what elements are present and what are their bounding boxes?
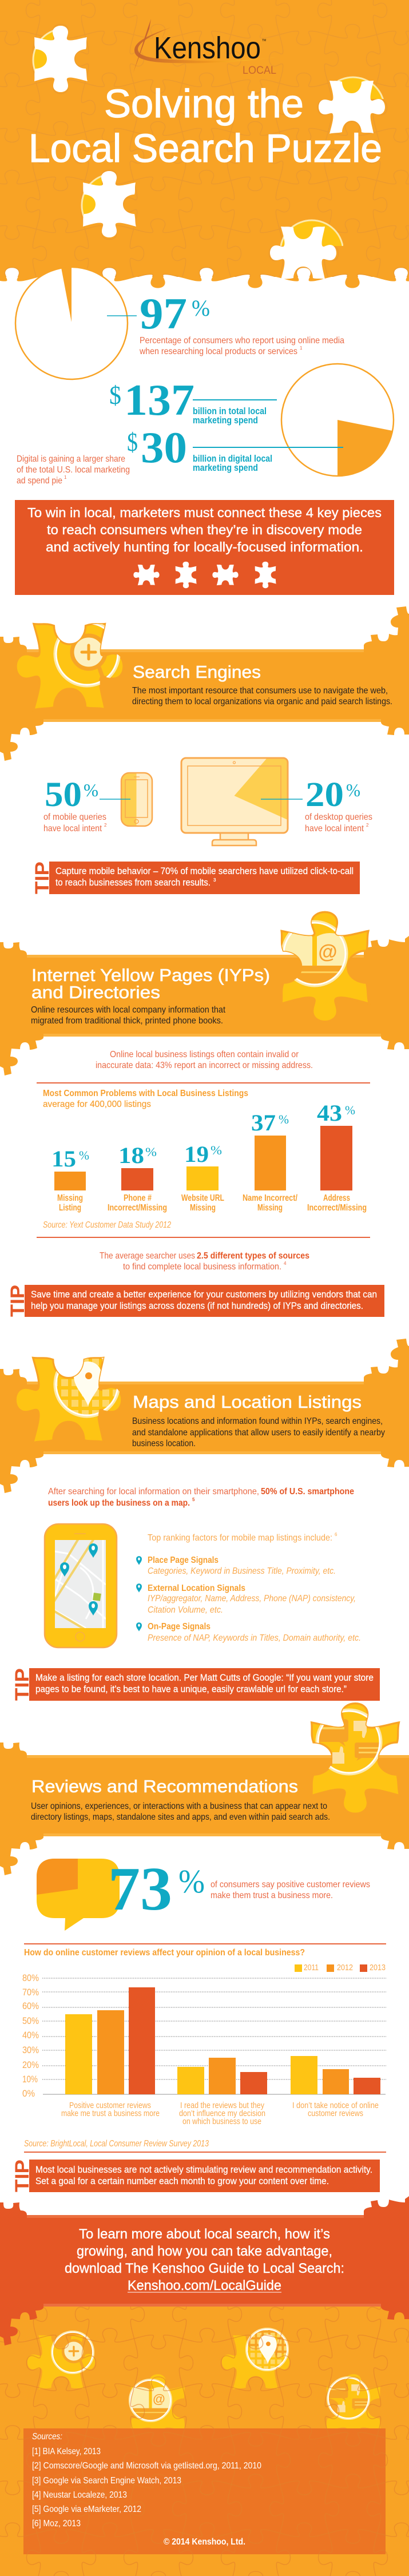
text: 2.5 types of sources: 4 <box>284 1261 287 1266</box>
icons: four puzzle pieces <box>27 2328 381 2443</box>
panel: maps and location listings band <box>0 1339 409 1493</box>
panel: internet yellow pages band <box>0 912 409 1075</box>
bar chart: how reviews affect opinion: 60% <box>22 2001 39 2011</box>
legend: 2013 <box>370 1963 386 1972</box>
text: 2.5 types of sources: to find complete local business information. <box>123 1262 281 1272</box>
list item: on-page signals: Presence of NAP, Keywords in Titles, Domain authority, etc. <box>148 1633 361 1643</box>
icon: search puzzle piece <box>16 621 124 710</box>
bar chart: most common problems: Phone # <box>124 1193 152 1203</box>
stat: 50 percent mobile: % <box>84 780 98 800</box>
list: ranking factors <box>136 1532 361 1643</box>
stat: 97 percent of consumers: Percentage of consumers who report using online media <box>140 336 344 346</box>
text: invalid listing data <box>96 1050 313 1070</box>
bar chart: most common problems: % <box>145 1145 157 1159</box>
text: download the guide: Kenshoo.com/LocalGuide <box>128 2278 281 2293</box>
stat: 73 percent trust reviews: of consumers say positive customer reviews <box>211 1880 370 1890</box>
panel: call to action <box>0 2196 409 2345</box>
bar chart: most common problems: % <box>211 1143 222 1157</box>
missing puzzle pieces in header <box>33 26 385 283</box>
list item: external location signals: External Location Signals <box>148 1583 245 1593</box>
bar chart: how reviews affect opinion: 30% <box>22 2045 39 2055</box>
bar chart: how reviews affect opinion <box>22 1944 386 2152</box>
text: download the guide: growing, and how you can take advantage, <box>77 2244 332 2259</box>
tip: manage listings: Save time and create a better experience for your customers by utilizing vendors that can <box>31 1289 377 1300</box>
stat: 50 percent mobile: 2 <box>104 823 107 828</box>
text: 2.5 types of sources: 2.5 different types of sources <box>197 1251 309 1261</box>
bar chart: how reviews affect opinion: 70% <box>22 1987 39 1998</box>
text: copyright: © 2014 Kenshoo, Ltd. <box>164 2537 245 2547</box>
bar chart: most common problems: Missing <box>257 1203 283 1213</box>
callout: 4 key pieces: To win in local, marketers must connect these 4 key pieces <box>27 505 382 520</box>
icon: directory puzzle piece <box>281 912 370 1022</box>
bar chart: how reviews affect opinion: I don’t take notice of online <box>292 2101 379 2110</box>
bar chart: most common problems: 15 <box>51 1146 76 1172</box>
text: maps description <box>132 1416 385 1448</box>
text: sources: [3] Google via Search Engine Watch, 2013 <box>32 2476 181 2486</box>
text: smartphone map lookup <box>48 1487 354 1508</box>
bar chart: how reviews affect opinion: I read the reviews but they <box>180 2101 265 2110</box>
stat: 50 percent mobile: of mobile queries <box>43 812 106 822</box>
title: Solving the <box>104 81 304 126</box>
text: download the guide: To learn more about local search, how it’s <box>79 2226 330 2242</box>
heading: search engines: Search Engines <box>133 662 261 682</box>
bar chart: how reviews affect opinion: 40% <box>22 2030 39 2041</box>
stat: 73 percent trust reviews <box>108 1855 370 1923</box>
text: smartphone map lookup: 5 <box>192 1497 195 1502</box>
stat: 50 percent mobile: have local intent <box>43 824 102 833</box>
list item: place page signals <box>136 1555 336 1576</box>
footer: orange puzzle background with pieces and sources <box>0 2305 409 2576</box>
heading: maps and location listings: Maps and Location Listings <box>133 1392 362 1412</box>
text: sources: [5] Google via eMarketer, 2012 <box>32 2504 141 2514</box>
text: digital share caption <box>17 454 130 486</box>
stat: 73 percent trust reviews: make them trust a business more. <box>211 1891 333 1900</box>
pie: digital share of local spend <box>281 364 394 477</box>
legend: 2011 <box>304 1963 319 1972</box>
stat: 97 percent of consumers: 97 <box>140 289 187 338</box>
icon: map puzzle piece <box>15 1352 122 1443</box>
tip: capture mobile behavior: TIP <box>31 862 53 894</box>
logo: Kenshoo Local <box>133 19 276 77</box>
chart source: Source: BrightLocal, Local Consumer Review Survey 2013 <box>24 2139 209 2149</box>
tip: manage listings: TIP <box>7 1285 29 1317</box>
stat: 20 percent desktop <box>305 776 372 833</box>
text: sources: [4] Neustar Localeze, 2013 <box>32 2490 127 2500</box>
tip: store location listing <box>11 1668 380 1701</box>
bar chart: how reviews affect opinion: customer reviews <box>308 2109 363 2118</box>
text: sources: [6] Moz, 2013 <box>32 2519 81 2529</box>
text: digital share caption: 1 <box>64 475 67 480</box>
tip: stimulate reviews <box>11 2160 380 2192</box>
tip: stimulate reviews: Most local businesses are not actively stimulating review and recommendation activity. <box>35 2165 372 2175</box>
callout: 4 key pieces <box>15 500 394 595</box>
bar chart: how reviews affect opinion: 10% <box>22 2074 38 2085</box>
logo: Kenshoo Local: LOCAL <box>243 65 276 77</box>
bar chart: most common problems: Name Incorrect/ <box>243 1193 297 1203</box>
tip: stimulate reviews: TIP <box>11 2160 33 2192</box>
text: digital share caption: Digital is gaining a larger share <box>17 454 125 464</box>
bar chart: most common problems: Listing <box>59 1203 81 1213</box>
tip: capture mobile behavior <box>31 862 360 894</box>
text: reviews description: directory listings, maps, standalone sites and apps, and even within paid search ads. <box>31 1812 330 1822</box>
bar chart: how reviews affect opinion: 0% <box>22 2088 35 2099</box>
text: sources: [2] Comscore/Google and Microsoft via getlisted.org, 2011, 2010 <box>32 2461 261 2471</box>
logo: Kenshoo Local: Kenshoo <box>154 31 261 65</box>
bar chart: how reviews affect opinion: 20% <box>22 2059 39 2070</box>
stat: 97 percent of consumers: % <box>192 295 210 321</box>
stat: 97 percent of consumers: when researching local products or services <box>139 347 297 356</box>
list: ranking factors: Top ranking factors for mobile map listings include: <box>148 1533 332 1543</box>
stat: 30 billion <box>127 423 343 473</box>
text: smartphone map lookup: 50% of U.S. smartphone <box>261 1487 354 1497</box>
text: download the guide: download The Kenshoo Guide to Local Search: <box>65 2261 344 2276</box>
heading: reviews and recommendations: Reviews and Recommendations <box>31 1776 298 1796</box>
text: download the guide <box>65 2226 344 2293</box>
text: smartphone map lookup: After searching for local information on their smartphone, <box>48 1487 259 1497</box>
stat: 50 percent mobile <box>43 776 107 833</box>
stat: 97 percent of consumers: 1 <box>300 346 303 351</box>
text: invalid listing data: inaccurate data: 43% report an incorrect or missing address. <box>96 1061 313 1070</box>
bar chart: most common problems <box>37 1083 370 1237</box>
text: reviews description <box>31 1801 330 1822</box>
bar chart: most common problems: Missing <box>190 1203 216 1213</box>
text: maps description: business location. <box>132 1439 196 1448</box>
bar chart: most common problems: % <box>79 1148 89 1162</box>
text: invalid listing data: Online local business listings often contain invalid or <box>110 1050 299 1059</box>
list item: external location signals: Citation Volume, etc. <box>148 1605 223 1615</box>
pie: 97 percent <box>15 267 137 379</box>
header: orange puzzle background <box>0 0 409 288</box>
panel: search engines band <box>0 606 409 761</box>
stat: 30 billion: marketing spend <box>193 463 258 473</box>
tip: manage listings: help you manage your listings across dozens (if not hundreds) of IYPs and directories. <box>31 1301 363 1311</box>
bar chart: how reviews affect opinion: on which business to use <box>182 2117 261 2126</box>
icon: mobile phone <box>100 773 152 826</box>
stat: 137 billion: $ <box>109 380 121 410</box>
stat: 20 percent desktop: 2 <box>366 823 369 828</box>
chart source: Source: Yext Customer Data Study 2012 <box>43 1220 171 1230</box>
text: reviews description: User opinions, experiences, or interactions with a business that can appear next to <box>31 1801 327 1811</box>
bar chart: most common problems: 18 <box>118 1142 144 1168</box>
tip: capture mobile behavior: 3 <box>213 878 216 883</box>
list item: place page signals: Place Page Signals <box>148 1555 219 1565</box>
tip: store location listing: pages to be found, it’s best to have a unique, easily crawlable url for each store.” <box>35 1684 347 1694</box>
list item: on-page signals: On-Page Signals <box>148 1622 211 1632</box>
text: directories description: migrated from traditional thick, printed phone books. <box>31 1016 223 1026</box>
title <box>29 81 382 170</box>
list: ranking factors: 6 <box>335 1532 337 1537</box>
bar chart: how reviews affect opinion: make me trust a business more <box>61 2109 160 2118</box>
text: directories description <box>31 1005 225 1026</box>
bar chart: most common problems: 37 <box>251 1110 276 1136</box>
callout: 4 key pieces: and actively hunting for locally-focused information. <box>46 539 363 554</box>
heading: internet yellow pages: Internet Yellow Pages (IYPs) <box>31 965 270 985</box>
stat: 73 percent trust reviews: 73 <box>108 1855 172 1923</box>
stat: 20 percent desktop: of desktop queries <box>305 812 372 822</box>
text: 2.5 types of sources: The average searcher uses <box>100 1251 195 1261</box>
text: smartphone map lookup: users look up the business on a map. <box>48 1498 190 1508</box>
text: 2.5 types of sources <box>100 1251 309 1272</box>
panel: reviews and recommendations band <box>0 1704 409 1875</box>
bar chart: most common problems: % <box>279 1112 289 1126</box>
text: search engines description: The most important resource that consumers use to navigate the web, <box>132 686 388 696</box>
bar chart: how reviews affect opinion: 50% <box>22 2015 39 2026</box>
tip: manage listings <box>7 1285 384 1317</box>
legend <box>295 1963 386 1972</box>
list item: external location signals: IYP/aggregator, Name, Address, Phone (NAP) consistency, <box>148 1594 356 1603</box>
bar chart: most common problems: Missing <box>57 1193 83 1203</box>
tip: store location listing: TIP <box>11 1668 33 1701</box>
chart title: average for 400,000 listings <box>43 1100 151 1109</box>
icon: speech bubble pie <box>37 1859 120 1931</box>
text: digital share caption: of the total U.S. local marketing <box>17 465 130 475</box>
bar chart: most common problems: Website URL <box>181 1193 224 1203</box>
stat: 20 percent desktop: have local intent <box>305 824 364 833</box>
bar chart: most common problems: 19 <box>184 1141 209 1167</box>
stat: 73 percent trust reviews: % <box>178 1863 205 1900</box>
tip: capture mobile behavior: Capture mobile behavior – 70% of mobile searchers have utilized click-to-call <box>55 866 354 876</box>
stat: 137 billion: marketing spend <box>193 415 258 426</box>
list item: external location signals <box>136 1583 356 1615</box>
tip: stimulate reviews: Set a goal for a certain number each month to grow your content over time. <box>35 2176 329 2186</box>
text: sources: Sources: <box>32 2432 62 2442</box>
bar chart: most common problems: Incorrect/Missing <box>307 1203 367 1213</box>
heading: internet yellow pages: and Directories <box>31 982 160 1002</box>
tip: capture mobile behavior: to reach businesses from search results. <box>55 878 211 888</box>
chart title: Most Common Problems with Local Business Listings <box>43 1089 248 1098</box>
bar chart: how reviews affect opinion: don’t influence my decision <box>179 2109 265 2118</box>
bar chart: how reviews affect opinion: Positive customer reviews <box>69 2101 151 2110</box>
text: digital share caption: ad spend pie <box>17 476 62 486</box>
text: sources: [1] BIA Kelsey, 2013 <box>32 2447 101 2456</box>
bar chart: most common problems: Incorrect/Missing <box>108 1203 167 1213</box>
title: Local Search Puzzle <box>29 126 382 170</box>
icon: desktop monitor <box>181 758 303 846</box>
bar chart: most common problems: 43 <box>317 1100 342 1126</box>
stat: 50 percent mobile: 50 <box>45 776 82 814</box>
text: search engines description <box>132 686 392 706</box>
icon: smartphone with map <box>45 1524 117 1648</box>
stat: 97 percent of consumers <box>139 289 344 356</box>
stat: 137 billion: billion in total local <box>193 406 267 416</box>
legend: 2012 <box>337 1963 353 1972</box>
chart title <box>43 1089 248 1109</box>
stat: 137 billion <box>109 375 277 426</box>
list item: place page signals: Categories, Keyword in Business Title, Proximity, etc. <box>148 1566 336 1576</box>
heading: internet yellow pages <box>31 965 270 1002</box>
text: directories description: Online resources with local company information that <box>31 1005 225 1015</box>
stat: 137 billion: 137 <box>124 375 194 424</box>
bar chart: how reviews affect opinion: 80% <box>22 1972 39 1983</box>
bar chart: most common problems: Address <box>323 1193 350 1203</box>
text: maps description: Business locations and information found within IYPs, search engines, <box>132 1416 383 1426</box>
list item: on-page signals <box>136 1622 361 1643</box>
stat: 30 billion: $ <box>127 427 138 457</box>
stat: 20 percent desktop: 20 <box>305 776 344 814</box>
stat: 20 percent desktop: % <box>346 780 360 800</box>
logo: Kenshoo Local: TM <box>262 39 266 42</box>
callout: 4 key pieces: to reach consumers when they’re in discovery mode <box>47 522 362 537</box>
tip: store location listing: Make a listing for each store location. Per Matt Cutts of Google: “If you want your store <box>35 1673 374 1683</box>
text: sources <box>32 2432 261 2529</box>
bar chart: most common problems: % <box>345 1103 355 1117</box>
chart title: How do online customer reviews affect your opinion of a local business? <box>24 1948 305 1958</box>
icon: reviews puzzle piece <box>312 1704 400 1813</box>
stat: 30 billion: 30 <box>141 423 187 472</box>
stat: 30 billion: billion in digital local <box>193 454 272 464</box>
